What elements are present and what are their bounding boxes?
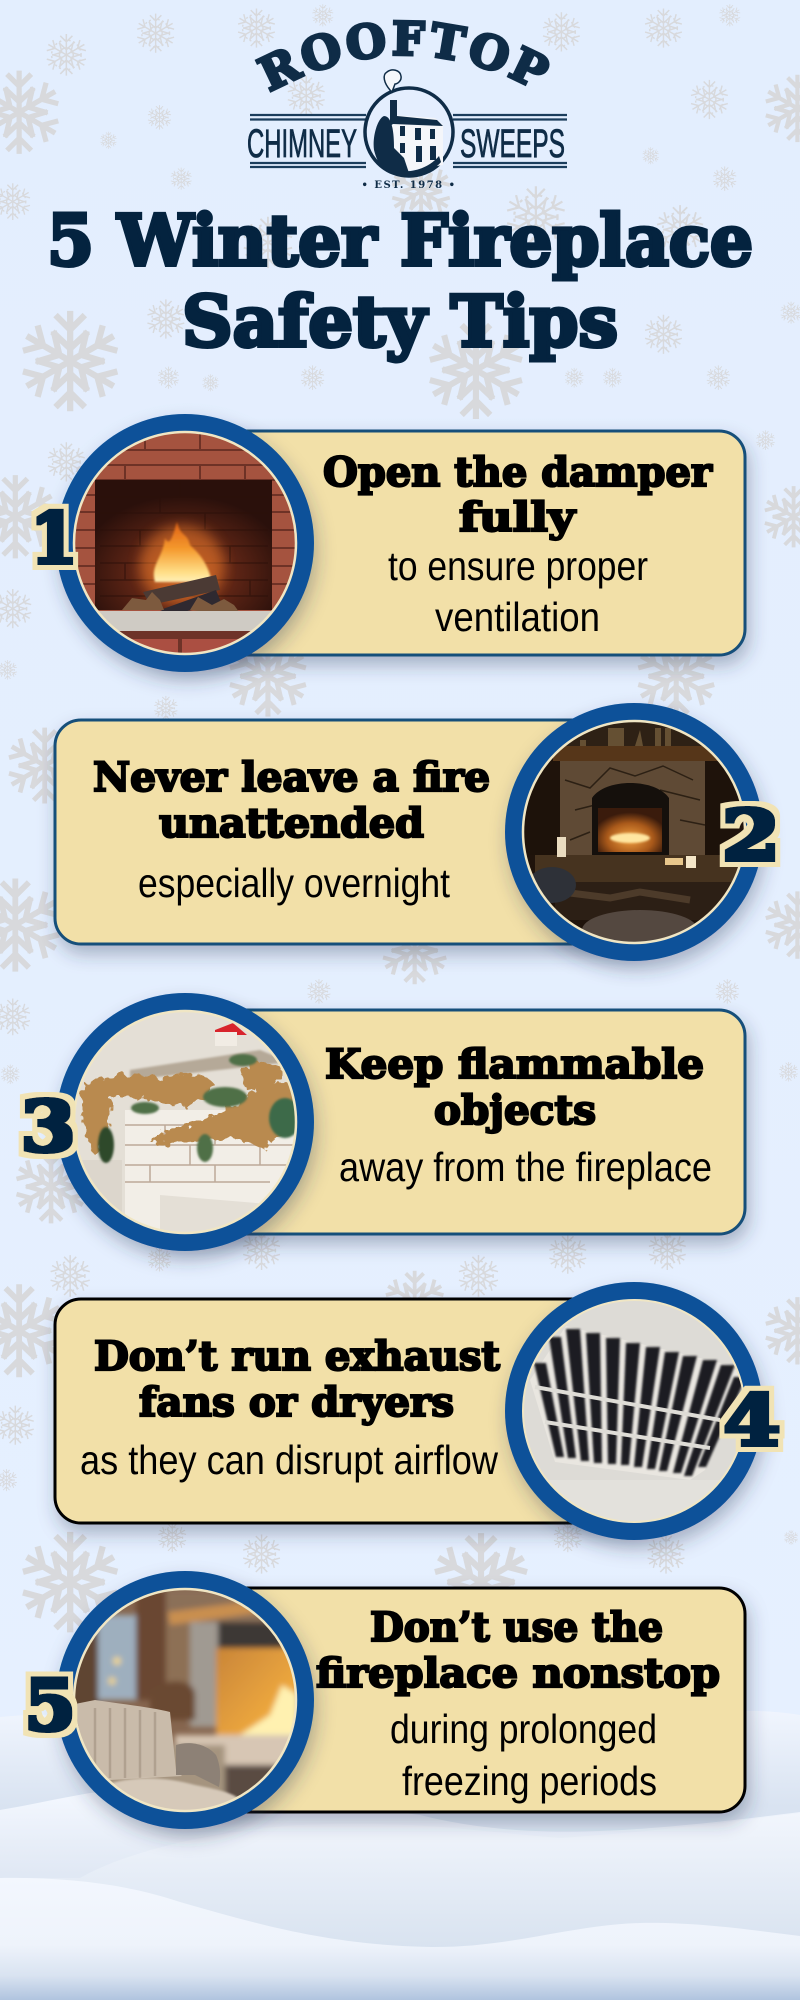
text: tip 4: as they can disrupt airflow (80, 1437, 498, 1483)
number badge 2: 2 (721, 794, 781, 877)
panel: tip 1 card (150, 431, 745, 655)
panel: tip 4 card (55, 1299, 650, 1523)
number badge 1: 1 (30, 497, 78, 580)
text: tip 2 (93, 754, 490, 906)
logo house badge (365, 70, 453, 176)
text: tip 1: Open the damper (323, 449, 713, 496)
text: tip 5 (316, 1604, 720, 1804)
number badge 4: 4 (723, 1379, 781, 1462)
text: tip 1 (323, 449, 713, 640)
text: tip 5: during prolonged (390, 1706, 657, 1752)
text: tip 3: objects (434, 1087, 596, 1134)
text: tip 1: fully (459, 494, 577, 541)
tip 2 image circle: stone fireplace (505, 703, 763, 961)
tip 5 image circle: cozy blurred fireplace (56, 1571, 314, 1829)
logo: Rooftop Chimney Sweeps (247, 20, 567, 191)
logo rules (250, 115, 567, 167)
text: tip 5: freezing periods (402, 1758, 657, 1804)
panel: tip 5 card (150, 1588, 745, 1812)
title line 2: Safety Tips (182, 280, 618, 363)
logo SWEEPS: SWEEPS (460, 122, 565, 166)
tip 1 image circle: brick fireplace (56, 414, 314, 672)
text: tip 3: away from the fireplace (339, 1144, 712, 1190)
title (47, 199, 753, 363)
text: tip 2: unattended (159, 800, 424, 847)
snow drifts (0, 1711, 800, 2000)
panel: tip 2 card (55, 720, 650, 944)
tip 4 image circle: air vent (505, 1282, 763, 1540)
text: tip 4: Don’t run exhaust (94, 1333, 501, 1380)
text: tip 5: fireplace nonstop (316, 1650, 720, 1697)
title line 1: 5 Winter Fireplace (47, 199, 753, 282)
number badge 3: 3 (20, 1085, 76, 1168)
text: tip 3 (325, 1041, 712, 1190)
text: tip 2: Never leave a fire (93, 754, 490, 801)
text: tip 5: Don’t use the (370, 1604, 663, 1651)
text: tip 1: to ensure proper (388, 543, 648, 589)
text: tip 3: Keep flammable (325, 1041, 704, 1088)
tip 3 image circle: mantel garland (56, 993, 314, 1251)
logo established date: • EST. 1978 • (361, 180, 457, 191)
text: tip 1: ventilation (435, 594, 600, 640)
number badge 5: 5 (24, 1664, 76, 1747)
text: tip 4: fans or dryers (139, 1379, 454, 1426)
text: tip 4 (80, 1333, 501, 1483)
text: tip 2: especially overnight (138, 860, 451, 906)
panel: tip 3 card (150, 1010, 745, 1234)
logo CHIMNEY: CHIMNEY (247, 122, 357, 166)
logo wordmark arc: ROOFTOP (254, 20, 550, 93)
